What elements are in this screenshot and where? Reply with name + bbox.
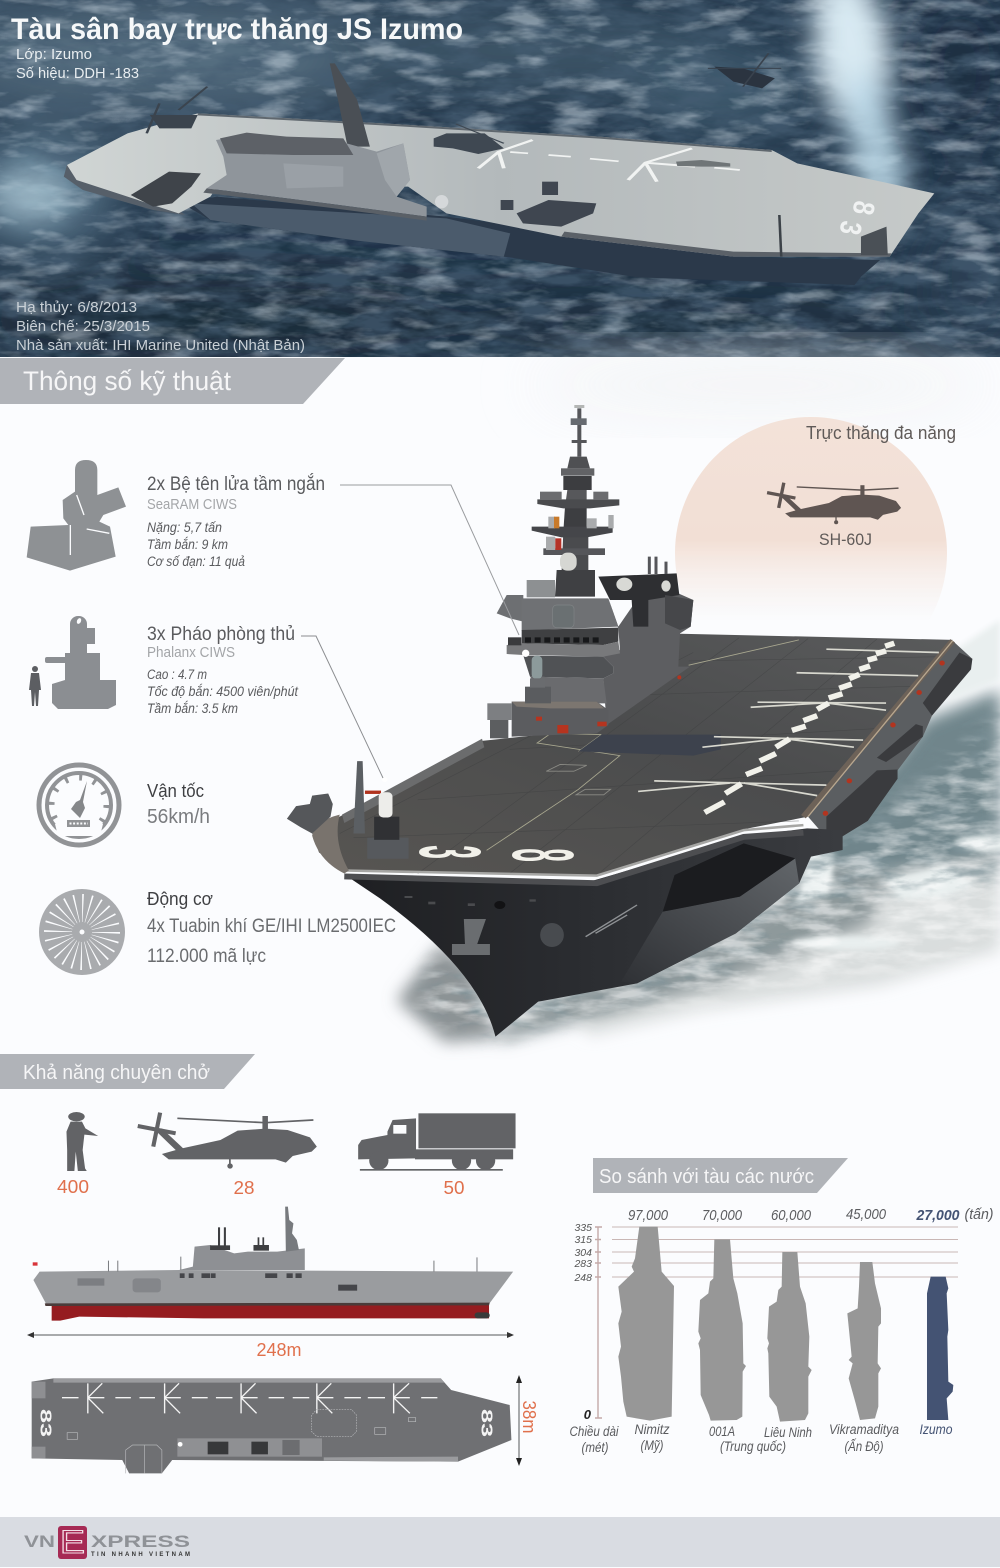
dark hull band: [523, 656, 613, 678]
mast boxes and flags: [546, 515, 614, 550]
beam label: 38m: [519, 1400, 540, 1434]
ship names: (Trung quốc): [720, 1439, 786, 1454]
hero island superstructure: [203, 133, 448, 221]
icon: speedometer: [39, 765, 119, 845]
length label: 248m: [256, 1339, 302, 1360]
launch date: Hạ thủy: 6/8/2013: [16, 299, 137, 316]
hero panel: ship at sea: [0, 0, 1000, 370]
parked helicopter: [434, 124, 504, 154]
top view of ship: [32, 1378, 511, 1473]
length grid lines: [612, 1227, 958, 1277]
ship names: 001A: [709, 1424, 735, 1439]
bow deck number: 83: [478, 1409, 494, 1437]
length arrow: [27, 1332, 514, 1338]
banner: carrying capacity: [0, 1054, 255, 1089]
axis labels: 0: [584, 1407, 592, 1422]
001A silhouette: [698, 1239, 746, 1421]
deck grid: [340, 638, 941, 873]
length axis: [595, 1227, 602, 1418]
ship names: Vikramaditya: [829, 1422, 899, 1437]
hero deck number: 8: [846, 198, 882, 218]
manufacturer: Nhà sản xuất: IHI Marine United (Nhật Bản): [16, 337, 305, 354]
SeaRAM heading: 2x Bệ tên lửa tầm ngắn: [147, 473, 325, 495]
ship names: (Ấn Độ): [844, 1439, 884, 1454]
flying helicopter: [708, 53, 781, 88]
beam arrow: [516, 1375, 522, 1466]
side fittings: [527, 580, 555, 597]
runway markings: [638, 649, 939, 796]
axis labels: [573, 1222, 592, 1422]
bow mast: [779, 215, 781, 257]
hull number marking: [586, 905, 637, 937]
axis labels: 335: [574, 1222, 592, 1234]
banner: technical specs: [0, 358, 345, 404]
soft cloud background: [530, 361, 990, 409]
SeaRAM details: Tầm bắn: 9 km: [147, 537, 228, 552]
runway dashes: [705, 643, 894, 812]
helicopter model: SH-60J: [819, 530, 872, 549]
base deck: [512, 702, 608, 737]
osprey on deck: [147, 87, 207, 133]
hull side: [182, 197, 880, 285]
starboard rail: [803, 641, 953, 817]
hero deck number: 3: [833, 218, 869, 238]
Phalanx details: [147, 667, 299, 716]
deck fittings: [108, 1257, 477, 1272]
ship names: Izumo: [920, 1422, 953, 1437]
ocean photo background: [0, 0, 1000, 370]
count: helicopters: 28: [234, 1177, 254, 1198]
hull: [345, 828, 843, 1037]
flight deck: [287, 634, 953, 883]
comparison chart: [570, 1206, 994, 1455]
island and mast: [487, 405, 693, 738]
deck shadow: [676, 160, 730, 167]
starboard sponsons: [808, 641, 972, 838]
deck markings: [478, 140, 740, 182]
SeaRAM details: [147, 520, 245, 569]
port walkway: [342, 739, 484, 823]
Phalanx details: Tốc độ bắn: 4500 viên/phút: [147, 684, 299, 699]
ship names: (Mỹ): [640, 1438, 664, 1453]
grey upper hull: [33, 1270, 513, 1305]
upper dark block: [598, 573, 679, 627]
tonnage labels: 70,000: [702, 1207, 743, 1224]
stern deck number: 83: [36, 1409, 54, 1437]
island plan: [177, 1438, 322, 1457]
stern elevator cutout: [131, 172, 201, 207]
capacity icons: [57, 1112, 516, 1198]
stern boats: [287, 794, 333, 834]
icon: Phalanx gun: [45, 616, 116, 709]
Vikramaditya silhouette: [847, 1262, 881, 1420]
Nimitz silhouette: [618, 1227, 674, 1421]
bow mast: [353, 761, 365, 834]
side profile of ship: [33, 1207, 513, 1321]
bow number: 3: [401, 845, 499, 859]
antennas: [574, 405, 584, 408]
exhaust stacks: [649, 557, 666, 574]
SeaRAM details: Cơ số đạn: 11 quả: [147, 554, 245, 569]
red lower hull: [52, 1304, 489, 1321]
hero carrier: [64, 53, 934, 285]
icon: turbine: [39, 889, 125, 975]
island side wall: [603, 593, 693, 725]
tonnage labels: 45,000: [846, 1206, 887, 1223]
white marker dot: [522, 650, 529, 657]
mast: [555, 570, 595, 597]
parked vehicles: [501, 182, 596, 227]
sea and wake: [397, 620, 1000, 1042]
deck guide line: [487, 640, 799, 850]
deck edge rim: [344, 825, 803, 876]
leader line: SeaRAM: [340, 485, 519, 635]
ship names: Nimitz: [634, 1422, 670, 1437]
logo VN: VN: [24, 1532, 55, 1551]
engine heading: Động cơ: [147, 889, 213, 909]
tonnage labels: [628, 1206, 994, 1224]
SeaRAM details: Nặng: 5,7 tấn: [147, 520, 222, 535]
deck plan: [32, 1378, 511, 1473]
mast: [285, 1207, 299, 1252]
SeaRAM model: SeaRAM CIWS: [147, 496, 237, 513]
bow gun: [861, 227, 888, 255]
hull lit side: [621, 858, 799, 983]
logo E: E: [60, 1524, 85, 1560]
icon: helicopter: [138, 1113, 317, 1169]
helicopter silhouette: [767, 483, 901, 524]
rectangle markers: [546, 764, 611, 795]
speed spec: [39, 765, 210, 845]
tonnage labels: 60,000: [771, 1207, 812, 1224]
engine spec: [39, 889, 396, 975]
superstructure: [179, 1245, 305, 1270]
stern rim: [312, 815, 349, 873]
icon: truck: [358, 1113, 516, 1171]
class line: Lớp: Izumo: [16, 46, 92, 63]
title: Tàu sân bay trực thăng JS Izumo: [11, 13, 463, 46]
ship names: (mét): [582, 1440, 608, 1455]
hull number line: Số hiệu: DDH -183: [16, 65, 139, 82]
helicopter callout circle: [675, 417, 956, 689]
lower block: [530, 677, 607, 703]
VnExpress logo: [24, 1524, 190, 1560]
white marker dot: [382, 777, 387, 782]
banner: comparison: [593, 1158, 848, 1193]
red fittings: [365, 661, 945, 816]
red fittings: [536, 675, 681, 733]
ship names: [570, 1422, 953, 1455]
Phalanx model: Phalanx CIWS: [147, 644, 235, 661]
banner: carrying capacity: Khả năng chuyên chở: [23, 1062, 210, 1084]
runway: [62, 1383, 437, 1413]
SeaRAM spec: [27, 460, 325, 571]
bridge wing band: [507, 642, 620, 657]
window band: [522, 628, 618, 645]
deck plan edge: [53, 1378, 444, 1383]
main carrier photo: [287, 405, 1000, 1042]
engine power: 112.000 mã lực: [147, 946, 266, 967]
banner: comparison: So sánh với tàu các nước: [599, 1166, 814, 1188]
main block: [522, 598, 618, 631]
tonnage labels: (tấn): [964, 1206, 994, 1223]
flight deck surface: [312, 634, 953, 876]
radomes: [616, 578, 671, 592]
deck panel: [578, 735, 721, 756]
tonnage labels: 97,000: [628, 1207, 669, 1224]
axis labels: 315: [574, 1234, 592, 1246]
axis labels: 304: [574, 1247, 592, 1259]
flight deck: [67, 113, 934, 257]
logo XPRESS: XPRESS: [91, 1532, 190, 1551]
ship names: Liêu Ninh: [764, 1425, 812, 1440]
anchor: [452, 919, 490, 955]
axis labels: 283: [573, 1258, 592, 1270]
speed value: 56km/h: [147, 806, 210, 828]
tonnage labels: 27,000: [916, 1207, 960, 1224]
icon: soldier: [66, 1112, 98, 1171]
bow number: 8: [494, 848, 592, 862]
leader line: Phalanx: [301, 636, 383, 778]
icon: human scale: [29, 666, 41, 706]
ship names: Chiều dài: [570, 1424, 619, 1439]
logo E box: [58, 1526, 87, 1559]
elevator outlines: [67, 1409, 416, 1473]
stern overhang: [64, 165, 185, 215]
Phalanx spec: [29, 616, 299, 716]
axis labels: 248: [573, 1272, 592, 1284]
window row: [180, 1273, 357, 1291]
helicopter label: Trực thăng đa năng: [806, 423, 956, 443]
footer band: [0, 1517, 1000, 1567]
hawse fitting: [540, 923, 564, 947]
SeaRAM: [532, 656, 542, 679]
commission date: Biên chế: 25/3/2015: [16, 318, 150, 335]
speed heading: Vận tốc: [147, 781, 204, 801]
Izumo silhouette: [927, 1277, 953, 1420]
engine type: 4x Tuabin khí GE/IHI LM2500IEC: [147, 916, 396, 937]
platforms: [561, 468, 594, 476]
Phalanx details: Cao : 4.7 m: [147, 667, 207, 682]
mast dome: [560, 553, 577, 571]
icon: SeaRAM mount: [27, 460, 126, 571]
mast: [330, 63, 370, 147]
dark flare panel: [663, 843, 795, 912]
ship silhouettes: [618, 1227, 953, 1422]
portholes: [405, 896, 536, 909]
count: soldiers: 400: [57, 1176, 89, 1197]
logo tagline: TIN NHANH VIETNAM: [91, 1552, 190, 1558]
Liaoning silhouette: [767, 1252, 812, 1422]
bow Phalanx: [367, 792, 409, 859]
count: trucks: 50: [444, 1177, 464, 1198]
Phalanx heading: 3x Pháo phòng thủ: [147, 624, 295, 645]
banner: technical specs: Thông số kỹ thuật: [23, 366, 231, 396]
Phalanx details: Tầm bắn: 3.5 km: [147, 701, 238, 716]
side sponson: [324, 1457, 458, 1462]
